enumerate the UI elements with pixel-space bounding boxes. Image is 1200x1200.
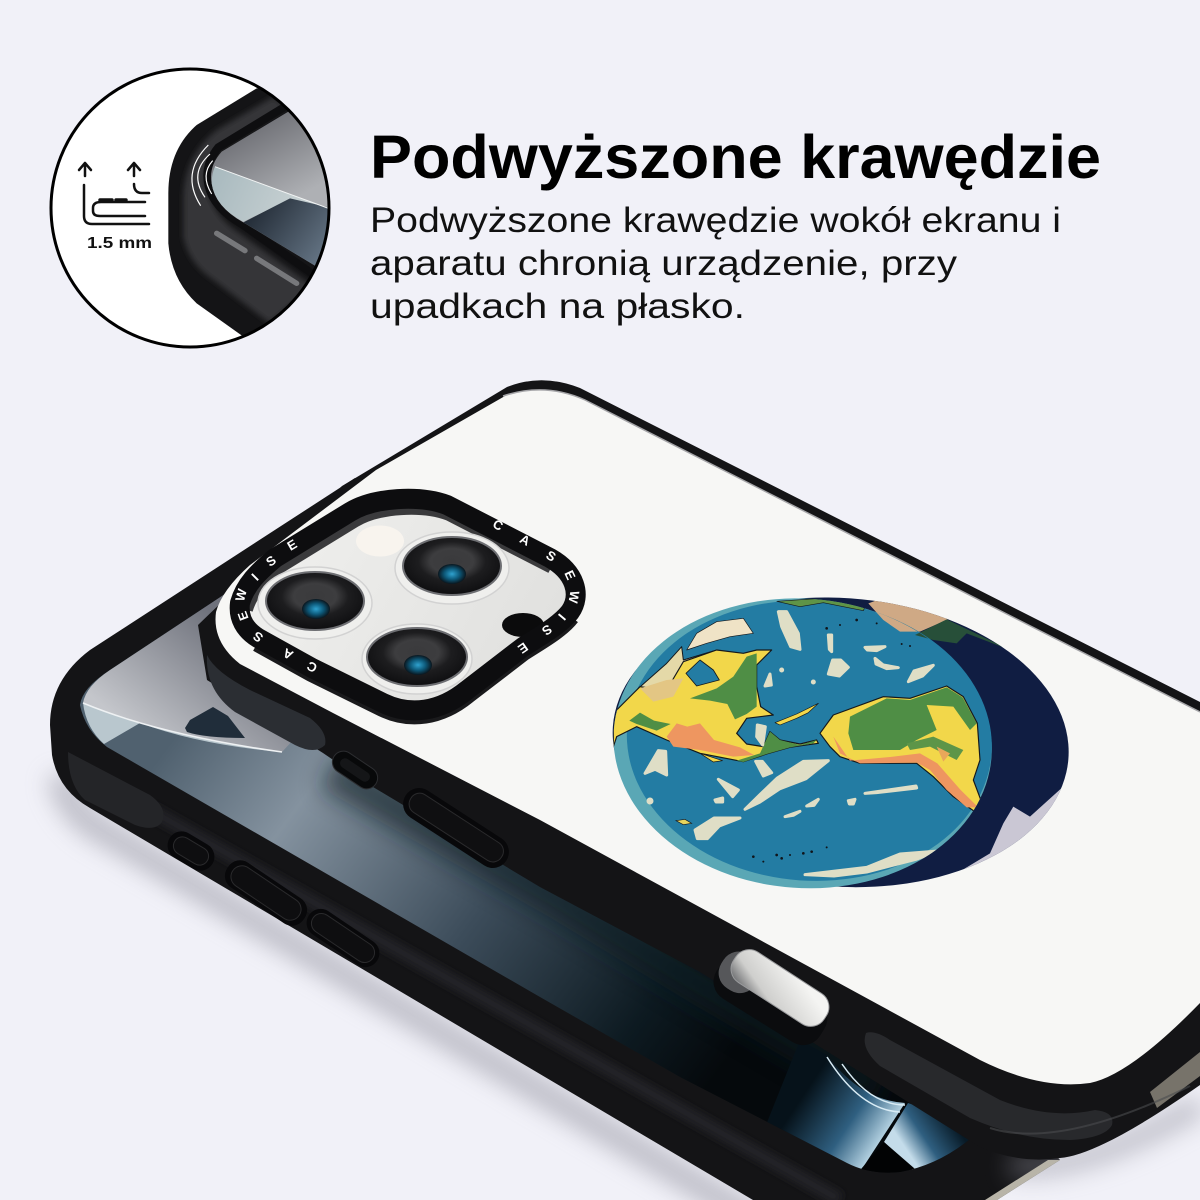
charging port silver [725,943,835,1033]
case grey shoulder [183,97,313,323]
clouds [645,612,938,876]
Amazon green [848,687,977,750]
reflection: light curves [827,1057,905,1112]
phone profile [93,202,145,216]
CASEWISE ring lettering: E [234,609,252,623]
body text: aparatu chronią urządzenie, przy [370,244,958,283]
lower phone screen [80,594,975,1173]
camera ring lower lip [258,616,570,714]
lens top [395,532,509,604]
screen wave white line [83,703,282,752]
Andes orange [833,737,978,807]
North America yellow [613,650,818,762]
grey pad at corner [865,1032,1112,1140]
frame soft highlight [150,810,840,1200]
case profile [84,184,149,224]
lens left glass [302,599,330,619]
CASEWISE ring lettering: E [284,536,300,554]
CASEWISE ring lettering: I [248,570,262,584]
Cuba and Caribbean [775,703,818,725]
lower phone (front with screen) [50,478,1060,1200]
CASEWISE ring lettering: C [490,516,506,534]
camera black ring [240,499,576,710]
Baja [700,753,723,762]
interior orange [937,747,950,762]
thickness label: 1.5 mm [87,235,152,252]
CASEWISE ring lettering: S [250,628,266,646]
north cap [776,598,865,611]
tan landmass [868,601,948,632]
top phone shadow [1010,1105,1200,1166]
lower phone shadow [60,775,760,1200]
lens bottom [362,624,472,694]
top rim highlight [503,390,1200,712]
top phone black case body [198,380,1200,1160]
volume down button [301,903,385,973]
South America yellow [820,686,995,811]
white back plate [216,390,1200,1084]
side button [397,782,515,874]
CASEWISE ring lettering: W [232,586,250,603]
arrow left [79,163,91,176]
volume up button [219,855,313,931]
globe: ocean inner [617,588,1001,893]
lidar sensor [502,613,544,637]
pale screen wedge [212,167,328,222]
reflection: black triangle [861,1142,914,1172]
grey pad lower left [68,752,164,828]
small dark islands [752,619,911,863]
lens left [258,567,372,639]
globe print [612,598,1069,888]
tan north [876,612,918,632]
CASEWISE ring lettering: A [280,645,296,663]
lens bottom glass [404,655,432,675]
tan north-west [640,678,683,702]
camera plate [240,499,576,710]
globe: land on night side [868,597,1073,877]
phone camera blocks [100,198,126,202]
grey pad under camera [207,655,325,750]
CASEWISE ring lettering: S [263,552,279,570]
arrow right [128,163,140,176]
small land: Hawaii [676,819,692,825]
raised edge detail circle [51,69,340,360]
body text: Podwyższone krawędzie wokół ekranu i [370,201,1061,240]
Central America green [737,732,817,762]
Greenland [687,618,753,650]
globe: night side [603,582,1079,902]
screen pale wave [83,703,282,752]
CASEWISE ring lettering: W [565,590,582,605]
lens top glass [438,564,466,584]
lens top halo [395,532,509,604]
reflection: blue fan left [768,1058,905,1169]
lens bottom body [367,628,467,686]
lens bottom halo [362,624,472,694]
lower phone black frame [50,478,1060,1200]
case dark inner rim [203,104,286,224]
CASEWISE ring lettering: I [555,611,569,623]
circle outline [51,69,329,347]
green north [915,632,928,639]
white flex arcs [192,145,213,206]
lens top body [403,537,501,595]
screen grey wallpaper [83,594,330,752]
dark green landmass [920,619,1002,647]
globe: ocean [604,586,1002,901]
Arctic islands [638,646,716,688]
body text [370,201,1061,326]
screen dark wallpaper patch [185,707,245,738]
case corner close-up [168,88,328,336]
top phone (back with case) [198,380,1200,1160]
lens left halo [258,567,372,639]
North America forest [690,653,757,719]
title: Podwyższone krawędzie [370,123,1101,191]
CASEWISE ring lettering: C [304,658,320,676]
reflection: blue fan right [884,1103,968,1170]
CASEWISE ring lettering: A [517,531,533,549]
grey landmass [964,788,1061,869]
west forest [629,713,671,731]
Pantanal green [907,737,963,760]
charging port housing [706,945,836,1053]
CASEWISE ring lettering: E [561,568,579,582]
lens left body [266,572,364,630]
body text: upadkach na płasko. [370,287,745,326]
silent switch [328,747,382,793]
speaker slot [1150,1052,1200,1108]
circle white fill [51,69,329,347]
CASEWISE ring lettering: E [515,639,531,657]
navy screen wedge [243,198,333,267]
case black body [168,88,315,336]
side highlight [217,233,297,283]
lower phone corner sliver [985,1160,1060,1200]
lower edge reflection [990,1086,1190,1134]
grey screen [211,112,333,267]
flash [356,526,404,556]
globe: land on day side [613,597,1010,876]
North America orange [667,723,754,757]
camera inner wall [243,505,553,609]
CASEWISE ring lettering [232,516,582,676]
screen shadow under top phone [330,770,975,1175]
mute button [162,826,220,876]
camera bump [232,499,582,714]
raised edge icon [79,163,149,224]
Hudson Bay [686,660,719,686]
screen white line [215,167,328,208]
CASEWISE ring lettering: S [539,621,555,639]
CASEWISE ring lettering: S [543,547,559,565]
